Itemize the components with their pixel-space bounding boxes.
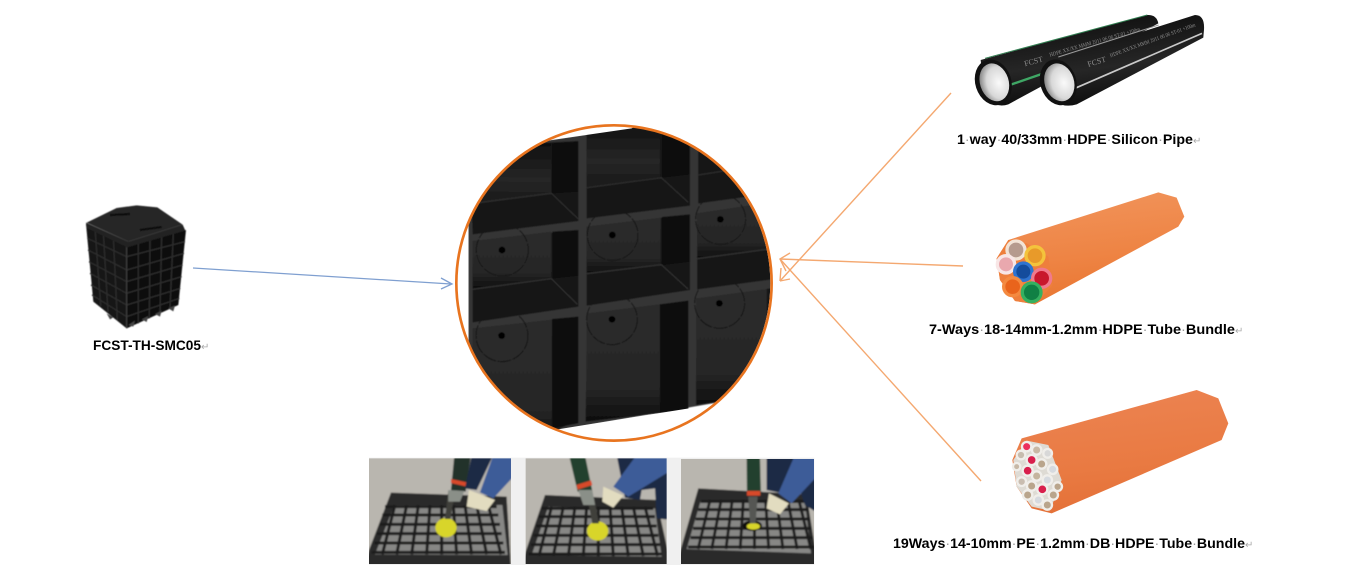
return mark: ↵ (1235, 326, 1243, 337)
label: 7-way bundle: 7-Ways·18-14mm-1.2mm ·HDPE·Tube·Bundle (929, 321, 1235, 337)
label: FCST-TH-SMC05: FCST-TH-SMC05 (93, 337, 201, 353)
white corners outside the wall (468, 126, 633, 340)
label: HDPE silicon pipe: 1·way·40/33mm·HDPE·Silicon·Pipe (957, 131, 1193, 147)
photo strip: drilling steps (365, 455, 818, 568)
product: 19-way tube bundle (1012, 390, 1228, 513)
photo 1 (369, 458, 511, 564)
product: manhole box (86, 205, 186, 328)
row 3 cells (472, 288, 770, 429)
return mark: ↵ (1193, 136, 1201, 147)
arrow: box to detail (193, 268, 452, 289)
orange ring (456, 125, 772, 441)
wall ribs (468, 134, 770, 430)
product: HDPE silicon pipes (969, 15, 1204, 110)
micro tubes (1013, 442, 1062, 510)
box left face (86, 224, 127, 328)
row 1 cells (472, 128, 744, 234)
bundle sheath (997, 192, 1184, 304)
front pipe: HDPE XX/XX MMM 2011 06 06 ST-01 +100m (1109, 22, 1197, 59)
front pipe (1034, 15, 1204, 110)
knockout discs (476, 194, 746, 362)
bundle sheath (1012, 390, 1228, 513)
detail circle (455, 124, 773, 442)
back pipe (969, 15, 1158, 110)
product: 7-way tube bundle (997, 192, 1184, 304)
label: 19-way bundle: 19Ways·14-10mm·PE·1.2mm·DB·HDPE·Tube·Bundle (893, 535, 1245, 551)
lid handles (110, 214, 162, 230)
detail photo of box wall (455, 124, 773, 442)
return mark: ↵ (201, 342, 209, 353)
box lid (87, 205, 183, 242)
knockout holes (498, 216, 724, 339)
bundle end face (1013, 441, 1062, 511)
coloured tubes (997, 241, 1051, 302)
photo 2 (526, 458, 667, 564)
bundle end face (997, 240, 1053, 304)
box bottom notches (107, 305, 175, 327)
back pipe print: FCST (1023, 55, 1044, 68)
box right face (127, 230, 186, 328)
back pipe: HDPE XX/XX MMM 2011 06 06 ST-01 +100m (1049, 27, 1141, 59)
arrows: products to detail (780, 93, 981, 481)
box lid rim (86, 223, 185, 247)
photo 3 (681, 459, 814, 564)
front pipe print: FCST (1086, 55, 1107, 69)
box grid ribs (87, 228, 185, 328)
return mark: ↵ (1245, 540, 1253, 551)
row 2 cells (473, 201, 780, 322)
